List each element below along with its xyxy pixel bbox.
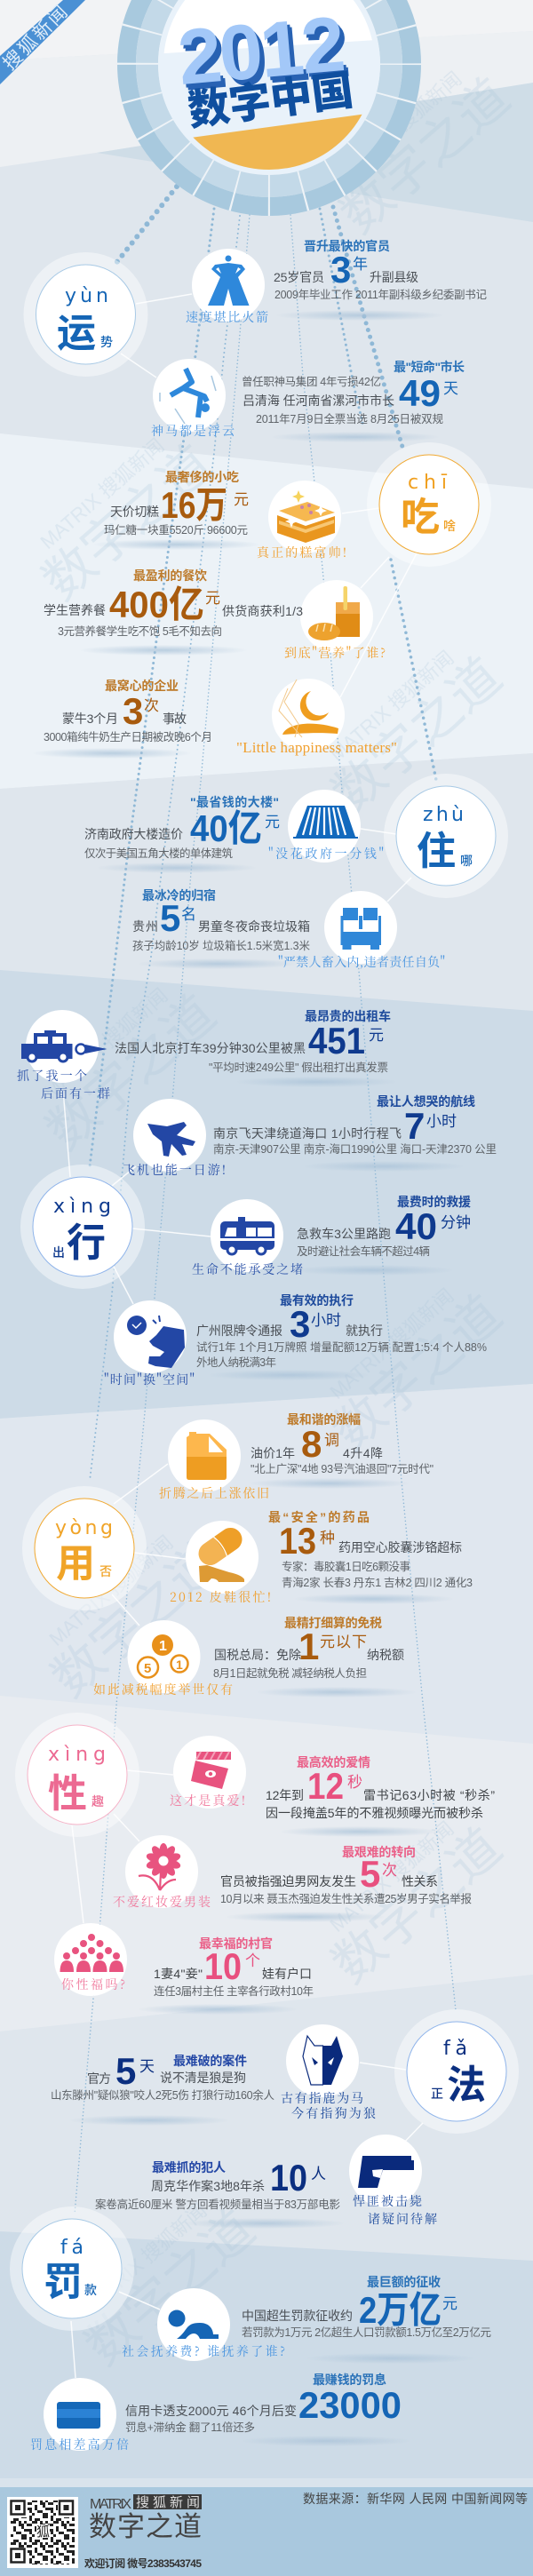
shadow (250, 1478, 410, 1489)
panel: 最精打细算的免税 (93, 1616, 417, 1698)
figures (115, 1020, 388, 1074)
category circle: 性趣: 性 (48, 1772, 87, 1816)
figures (242, 372, 458, 425)
watermarks: 数字之道 (330, 68, 521, 244)
brand: 数字之道 (89, 2511, 202, 2542)
figures (154, 1945, 314, 1998)
icon: clock and face (114, 1300, 187, 1373)
figures: 1妻4"妾" (154, 1967, 203, 1981)
panel: 最难破的案件 (51, 2024, 376, 2126)
figures: 天 (139, 2058, 155, 2075)
shadow (138, 2004, 298, 2015)
dotted connector lines (75, 187, 456, 2214)
category circle: 住哪: 哪 (460, 854, 473, 868)
caption: 不爱红妆爱男装 (113, 1893, 211, 1911)
icon: building (288, 790, 361, 863)
figures: 种 (320, 1530, 335, 1546)
shadow (242, 2436, 410, 2446)
figures: 仅次于美国五角大楼的单体建筑 (84, 847, 233, 860)
category circle: 出行: 行 (67, 1221, 106, 1265)
heading: 最"短命"市长 (394, 360, 465, 374)
caption: 速度堪比火箭 (186, 308, 268, 326)
figures: 试行1年 1个月1万牌照 增量配额12万辆 配置1:5:4 个人88% (196, 1340, 487, 1354)
panel: 晋升最快的官员 (186, 239, 487, 326)
data source: 数据来源：新华网 人民网 中国新闻网等 (303, 2492, 528, 2506)
shadow (236, 1077, 396, 1087)
caption (17, 1067, 110, 1102)
title badge (126, 0, 412, 206)
figures: 元以下 (320, 1634, 367, 1650)
caption: 你性福吗? (61, 1976, 125, 1993)
category circle: 用否: 否 (99, 1564, 112, 1578)
caption (353, 2192, 437, 2228)
figures: 调 (324, 1432, 339, 1449)
icon: standing person (192, 249, 265, 322)
category circle: 性趣: 趣 (91, 1794, 104, 1809)
figures: 药用空心胶囊涉铬超标 (338, 1540, 462, 1554)
QR code: 狐 (36, 2524, 50, 2540)
figures (213, 1626, 404, 1680)
caption: 飞机也能一日游! (123, 1161, 226, 1179)
watermarks: MATRIX 搜狐新闻 (36, 434, 169, 553)
figures (279, 1520, 473, 1589)
figures: 16万 (161, 484, 227, 526)
icon: credit card (44, 2378, 116, 2451)
heading: 最和谐的涨幅 (287, 1412, 361, 1427)
figures (132, 897, 310, 952)
footer (0, 2487, 533, 2576)
shadow (306, 2353, 475, 2364)
figures (213, 1105, 497, 1156)
caption: 古有指鹿为马 (281, 2089, 363, 2107)
panel: 最有效的执行 (104, 1293, 487, 1388)
category circle: 用否: 用 (56, 1542, 95, 1586)
caption: "严禁人畜入内,违者责任自负" (278, 953, 445, 971)
figures: 外地人纳税满3年 (196, 1356, 276, 1369)
category circle: 出行: 出 (52, 1245, 65, 1260)
heading: 最幸福的村官 (199, 1936, 273, 1951)
icon: coins (128, 1620, 201, 1693)
figures: 曾任职神马集团 4年亏损42亿 (242, 375, 381, 388)
figures (274, 249, 487, 301)
shadow (138, 958, 298, 969)
figures: 元 (265, 814, 280, 831)
panel: 最窝心的企业 (32, 679, 397, 759)
figures: 次 (382, 1862, 397, 1879)
figures: 南京飞天津绕道海口 1小时行程飞 (213, 1126, 402, 1141)
shadow (271, 432, 440, 442)
figures: 7 (404, 1105, 425, 1147)
brand: MATRIX (90, 2497, 131, 2512)
heading: 最难抓的犯人 (152, 2160, 226, 2174)
panel: 最高效的爱情 (170, 1736, 495, 1837)
figures: 法国人北京打车39分钟30公里被黑 (115, 1041, 306, 1055)
caption: 这才是真爱! (170, 1792, 245, 1809)
heading: 最昂贵的出租车 (305, 1009, 391, 1023)
figures: 13 (279, 1520, 316, 1562)
heading: 最巨额的征收 (367, 2275, 441, 2289)
heading: 最有效的执行 (280, 1293, 354, 1308)
caption: 诸疑问待解 (368, 2210, 437, 2228)
figures: 23000 (298, 2384, 402, 2426)
category circle: 正法: fǎ (443, 2038, 467, 2060)
figures: 贵州 (132, 919, 158, 934)
shadow (32, 748, 192, 759)
figures: 次 (144, 697, 159, 714)
icon: taxi (21, 1010, 107, 1083)
figures: 40亿 (190, 807, 262, 849)
category circle: 运势: yùn (65, 285, 108, 307)
caption: 折腾之后上涨依旧 (159, 1484, 269, 1502)
figures: 小时 (311, 1312, 341, 1329)
figures (84, 807, 280, 860)
watermarks: 数字之道 (322, 1818, 513, 1994)
category circle: 正法: 法 (447, 2063, 486, 2107)
shadow (294, 1594, 454, 1604)
caption: 今有指狗为狼 (291, 2104, 376, 2122)
heading: 最冰冷的归宿 (142, 888, 216, 902)
caption: 悍匪被击毙 (353, 2192, 422, 2210)
watermarks: MATRIX 搜狐新闻 (334, 68, 466, 187)
figures: 济南政府大楼造价 (84, 827, 183, 841)
figures: 3 (123, 690, 143, 732)
heading: 最艰难的转向 (342, 1845, 416, 1859)
figures: 8月1日起就免税 减轻纳税人负担 (213, 1666, 367, 1680)
panel: 最费时的救援 (192, 1195, 471, 1278)
icon: oil can (168, 1419, 241, 1492)
icon: pill and shoe (186, 1521, 259, 1594)
figures: 2009年毕业工作 2011年副科级乡纪委副书记 (274, 288, 487, 301)
panel: 最赚钱的罚息 (30, 2373, 410, 2453)
figures: 国税总局：免除 (214, 1648, 301, 1662)
figures: 元 (234, 491, 249, 508)
caption: 生命不能承受之堵 (192, 1260, 303, 1278)
watermarks: MATRIX 搜狐新闻 (40, 984, 172, 1103)
category circle: 正法: 正 (431, 2087, 443, 2101)
figures: 事故 (163, 712, 187, 726)
panel: 最艰难的转向 (113, 1835, 472, 1922)
caption: "没花政府一分钱" (268, 845, 384, 863)
figures: 分钟 (441, 1214, 471, 1231)
inner disc (163, 0, 372, 170)
panel: 最盈利的餐饮 (44, 568, 386, 662)
panel: 最和谐的涨幅 (159, 1412, 434, 1502)
panel: 最短命市长 (151, 359, 465, 442)
shadow (185, 2218, 345, 2229)
shadow (97, 863, 257, 873)
figures: 天 (443, 380, 458, 397)
figures: 10 (204, 1945, 242, 1987)
watermarks: MATRIX 搜狐新闻 (326, 1284, 458, 1403)
category circle: 正法 (394, 2009, 519, 2134)
figures (95, 2157, 340, 2211)
heading: "最省钱的大楼" (190, 795, 279, 809)
category circle: 出行: xìng (53, 1196, 111, 1218)
icon: bread and drink (300, 580, 373, 653)
heading: 最难破的案件 (173, 2054, 247, 2068)
icon: flower (125, 1835, 198, 1908)
shadow (275, 310, 444, 321)
category circle: 运势: 势 (100, 335, 113, 349)
category circle: 住哪: zhù (423, 804, 464, 826)
icon: coins: 1 (159, 1639, 167, 1654)
heading: 最高效的爱情 (297, 1755, 370, 1769)
figures (44, 690, 212, 743)
watermarks: 数字之道 (76, 2200, 266, 2376)
panel: 最昂贵的出租车 (17, 1009, 396, 1102)
figures: 天价切糕 (110, 505, 159, 519)
heading 2012: 2012 (174, 0, 348, 101)
icon: gun (349, 2135, 422, 2207)
heading: 最奢侈的小吃 (165, 470, 239, 484)
icon: people pyramid (54, 1923, 127, 1996)
ribbon: 搜狐新闻: 搜狐新闻 (0, 2, 72, 75)
caption: 后面有一群 (41, 1085, 110, 1102)
figures: 5 (115, 2050, 136, 2092)
brand: 搜狐新闻 (136, 2495, 200, 2510)
icon: plane (133, 1099, 206, 1172)
figures: 急救车3公里路跑 (297, 1227, 391, 1241)
figures: 49 (399, 372, 441, 414)
caption: 到底"营养"了谁? (284, 644, 386, 662)
category circle: 住哪 (384, 774, 508, 898)
figures: 油价1年 (251, 1446, 295, 1460)
figures: 雷书记63小时被 “秒杀” (363, 1788, 495, 1802)
figures: 专家：毒胶囊1日吃6颗没事 (282, 1560, 410, 1573)
figures: 25岁官员 (274, 270, 324, 284)
caption: 罚息相差高万倍 (30, 2436, 129, 2453)
figures (242, 2289, 491, 2339)
shadow (304, 1161, 464, 1172)
icon: wolf mask (286, 2024, 359, 2097)
figures: 12 (307, 1765, 344, 1807)
icon: moon (272, 679, 345, 751)
shadow (92, 539, 261, 550)
icon: dumpster (324, 891, 397, 964)
figures: 1 (298, 1626, 319, 1667)
watermarks: 数字之道 (322, 1285, 513, 1461)
heading 2012: 2012 (179, 5, 354, 107)
figures: 中国超生罚款征收约 (242, 2309, 353, 2323)
icon: coins: 1 (176, 1658, 183, 1672)
icon: ambulance (211, 1199, 283, 1272)
figures: 人 (311, 2166, 326, 2182)
panel: 最让人想哭的航线 (123, 1094, 497, 1179)
ring (126, 0, 412, 206)
heading: 最“安全”的药品 (268, 1510, 370, 1524)
figures: 蒙牛3个月 (62, 712, 118, 726)
shadow (293, 1265, 453, 1276)
figures: 纳税额 (367, 1648, 404, 1662)
brand (84, 2494, 202, 2570)
icon: crawling baby (157, 2288, 230, 2361)
shadow (69, 2115, 229, 2126)
figures: 元 (442, 2295, 457, 2312)
figures: 10 (270, 2157, 307, 2198)
figures: 周克华作案3地8年杀 (151, 2179, 265, 2193)
figures: 2万亿 (359, 2289, 442, 2331)
figures: 学生营养餐 (44, 603, 106, 617)
watermarks: 数字之道 (33, 435, 223, 611)
figures: 3元营养餐学生吃不饱 5毛不知去向 (58, 624, 222, 638)
figures: 3 (290, 1303, 310, 1345)
category circle: 性趣: xìng (48, 1744, 106, 1766)
watermarks: MATRIX 搜狐新闻 (79, 2199, 211, 2318)
caption (281, 2089, 376, 2122)
caption: 2012 皮鞋很忙! (170, 1588, 271, 1606)
figures: 孩子均龄10岁 垃圾箱长1.5米宽1.3米 (132, 939, 310, 952)
shadow (209, 1370, 369, 1380)
figures: 2011年7月9日全票当选 8月25日被双规 (256, 412, 443, 425)
watermarks: MATRIX 搜狐新闻 (326, 1817, 458, 1936)
icon: falling person (153, 359, 226, 432)
figures: 小时 (426, 1113, 457, 1130)
shadow (79, 645, 248, 656)
icon: clapperboard (173, 1736, 246, 1809)
figures (104, 484, 249, 537)
caption: "Little happiness matters" (236, 739, 397, 756)
panel: 最奢侈的小吃 (92, 470, 346, 561)
figures: 400亿 (109, 584, 204, 625)
category circle: 运势 (23, 252, 147, 377)
category circle: 吃啥: 吃 (401, 496, 440, 539)
heading: 晋升最快的官员 (304, 239, 390, 253)
heading: 最精打细算的免税 (284, 1616, 382, 1630)
figures: 4升4降 (343, 1446, 383, 1460)
panel: 最冰冷的归宿 (132, 888, 445, 971)
category circle: 吃啥: chī (408, 472, 448, 494)
category circle: 罚款: 罚 (44, 2261, 83, 2304)
figures: "平均时速249公里" 假出租打出真发票 (209, 1061, 388, 1074)
figures: 青海2家 长春3 丹东1 吉林2 四川2 通化3 (282, 1576, 473, 1589)
category circle: 罚款 (10, 2206, 134, 2331)
figures: 玛仁糖一块重5520斤 96600元 (104, 523, 248, 537)
figures: 就执行 (346, 1324, 383, 1338)
figures (44, 584, 303, 638)
category circle: 用否: yòng (55, 1517, 113, 1539)
figures: 年 (353, 256, 368, 273)
brand: 欢迎订阅 微号2383543745 (84, 2556, 202, 2570)
panel: 最难抓的犯人 (95, 2135, 437, 2229)
figures: 及时避让社会车辆不超过4辆 (297, 1244, 430, 1258)
panel: 最幸福的村官 (54, 1923, 314, 2015)
figures: "北上广深"4地 93号汽油退回"7元时代" (251, 1462, 434, 1475)
category circle: 罚款: fá (60, 2237, 84, 2259)
figures (297, 1205, 471, 1258)
caption: "时间"换"空间" (104, 1371, 195, 1388)
heading: 最盈利的餐饮 (133, 568, 207, 583)
figures: 升副县级 (370, 270, 418, 284)
figures: 信用卡透支2000元 46个月后变 (125, 2404, 297, 2418)
figures: 官员被指强迫男网友发生 (220, 1874, 356, 1888)
figures: 12年到 (266, 1788, 304, 1802)
white connectors (63, 294, 423, 2378)
category circle: 住哪: 住 (417, 830, 456, 873)
figures: 说不清是狼是狗 (160, 2071, 246, 2085)
caption: 抓了我一个 (17, 1067, 87, 1085)
category circle: 运势: 运 (57, 312, 96, 355)
figures: 因一段掩盖5年的不雅视频曝光而被秒杀 (266, 1806, 483, 1820)
figures: 广州限牌令通报 (196, 1324, 282, 1338)
watermarks: 数字之道 (322, 648, 513, 823)
figures: 山东滕州"疑似狼"咬人2死5伤 打狼行动160余人 (51, 2088, 274, 2102)
category circle: 吃啥: 啥 (443, 519, 456, 533)
heading 2012: 2012 (178, 3, 352, 105)
figures (196, 1303, 487, 1369)
watermarks: MATRIX 搜狐新闻 (326, 647, 458, 766)
watermarks: 数字之道 (36, 985, 227, 1161)
figures (266, 1765, 495, 1820)
category circle: 罚款: 款 (84, 2283, 97, 2297)
caption: 社会抚养费? 谁抚养了谁? (122, 2342, 285, 2360)
heading: 最让人想哭的航线 (377, 1094, 475, 1109)
shadow (257, 1687, 417, 1697)
watermarks: MATRIX 搜狐新闻 (45, 1531, 178, 1650)
figures (125, 2384, 402, 2434)
figures (251, 1423, 434, 1475)
shadow (226, 1912, 386, 1922)
figures: 3000箱纯牛奶生产日期被改晚6个月 (44, 730, 212, 743)
figures: 连任3届村主任 主宰各行政村10年 (154, 1984, 314, 1998)
category circle: 出行 (20, 1165, 145, 1289)
figures: 若罚款为1万元 2亿超生人口罚款额1.5万亿至2万亿元 (242, 2326, 491, 2339)
figures: 案卷高近60厘米 警方回看视频量相当于83万部电影 (95, 2198, 340, 2211)
figures: 元 (205, 590, 220, 607)
category circle: 性趣 (15, 1713, 139, 1837)
figures: 个 (245, 1952, 260, 1969)
figures (220, 1853, 472, 1905)
icon: coins: 5 (144, 1661, 151, 1676)
figures: 官方 (87, 2071, 111, 2086)
figures: 40 (395, 1205, 437, 1247)
figures: 名 (181, 906, 196, 923)
figures: 451 (308, 1020, 365, 1061)
caption: 神马都是浮云 (151, 422, 235, 440)
figures: 供货商获利1/3 (222, 604, 303, 618)
figures: 罚息+滞纳金 翻了11倍还多 (125, 2421, 255, 2434)
figures: 娃有户口 (262, 1967, 312, 1981)
QR code (7, 2497, 78, 2568)
category circle: 吃啥 (367, 442, 491, 567)
panel: 最安全的药品 (170, 1510, 473, 1606)
category circle: 用否 (22, 1486, 147, 1610)
figures: 3 (330, 249, 351, 290)
figures: 5 (160, 897, 180, 939)
figures: 吕清海 任河南省漯河市市长 (243, 394, 394, 408)
figures (51, 2050, 274, 2102)
figures: 秒 (347, 1774, 362, 1791)
figures: 性关系 (402, 1874, 438, 1888)
figures: 元 (369, 1027, 384, 1044)
figures: 男童冬夜命丧垃圾箱 (198, 919, 310, 934)
shadow (280, 1826, 440, 1837)
figures: 南京-天津907公里 南京-海口1990公里 海口-天津2370 公里 (213, 1142, 497, 1156)
figures: 8 (301, 1423, 322, 1465)
caption: 如此减税幅度举世仅有 (93, 1681, 233, 1698)
heading: 最窝心的企业 (105, 679, 179, 693)
figures: 5 (360, 1853, 380, 1895)
figures: 10月以来 聂玉杰强迫发生性关系遭25岁男子实名举报 (220, 1892, 472, 1905)
icon: cake (268, 481, 341, 553)
watermarks: 数字之道 (42, 1532, 232, 1708)
heading: 最赚钱的罚息 (313, 2373, 386, 2387)
heading 数字中国: 数字中国 (185, 66, 356, 134)
caption: 真正的糕富帅! (257, 544, 346, 561)
panel: 最巨额的征收 (122, 2275, 491, 2364)
heading: 最费时的救援 (397, 1195, 471, 1209)
panel: 最省钱的大楼 (84, 790, 384, 873)
